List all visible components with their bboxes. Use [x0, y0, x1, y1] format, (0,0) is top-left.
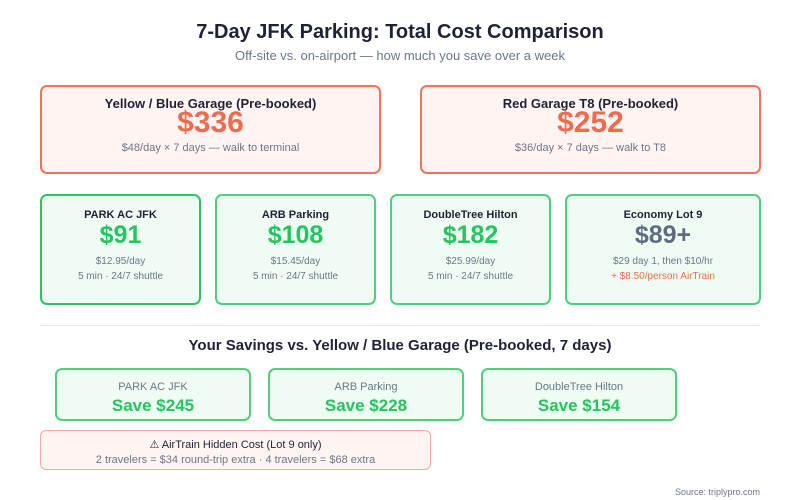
detail: $36/day × 7 days — walk to T8 [515, 142, 666, 154]
savings card: DoubleTree Hilton [481, 368, 677, 421]
panel: Economy Lot 9: $89+ [635, 221, 691, 249]
savings card: ARB Parking [268, 368, 464, 421]
panel: PARK AC JFK [40, 194, 201, 305]
price: $252 [557, 106, 624, 139]
panel: DoubleTree Hilton [390, 194, 551, 305]
callout: AirTrain hidden cost: ⚠ AirTrain Hidden Cost (Lot 9 only) [149, 439, 322, 451]
savings card: PARK AC JFK: PARK AC JFK [118, 381, 188, 393]
panel: Economy Lot 9: $29 day 1, then $10/hr [613, 256, 713, 267]
panel: Economy Lot 9: + $8.50/person AirTrain [611, 271, 715, 282]
savings heading: Your Savings vs. Yellow / Blue Garage (Pre-booked, 7 days) [189, 337, 611, 354]
savings card: DoubleTree Hilton: Save $154 [538, 396, 620, 415]
savings card: PARK AC JFK [55, 368, 251, 421]
panel: ARB Parking: ARB Parking [262, 209, 329, 221]
title: 7-Day JFK Parking: Total Cost Comparison [196, 21, 604, 43]
detail: $48/day × 7 days — walk to terminal [122, 142, 299, 154]
panel: Economy Lot 9: Economy Lot 9 [624, 209, 702, 221]
panel: ARB Parking: 5 min · 24/7 shuttle [253, 271, 338, 282]
panel: PARK AC JFK: 5 min · 24/7 shuttle [78, 271, 163, 282]
panel: Red Garage T8 [420, 85, 761, 174]
panel: DoubleTree Hilton: 5 min · 24/7 shuttle [428, 271, 513, 282]
panel: PARK AC JFK: $12.95/day [96, 256, 145, 267]
savings card: DoubleTree Hilton: DoubleTree Hilton [535, 381, 623, 393]
panel: PARK AC JFK: PARK AC JFK [84, 209, 157, 221]
price: $336 [177, 106, 244, 139]
heading: Red Garage T8 (Pre-booked) [503, 96, 678, 111]
savings card: PARK AC JFK: Save $245 [112, 396, 194, 415]
panel: Economy Lot 9 [565, 194, 761, 305]
heading: Yellow / Blue Garage (Pre-booked) [105, 96, 316, 111]
panel: ARB Parking: $108 [268, 221, 323, 249]
callout: AirTrain hidden cost [40, 430, 431, 470]
panel: ARB Parking: $15.45/day [271, 256, 320, 267]
panel: DoubleTree Hilton: $182 [443, 221, 498, 249]
panel: ARB Parking [215, 194, 376, 305]
source: Source: triplypro.com [675, 487, 760, 497]
savings card: ARB Parking: ARB Parking [334, 381, 397, 393]
subtitle: Off-site vs. on-airport — how much you save over a week [235, 48, 565, 63]
callout: AirTrain hidden cost: 2 travelers = $34 round-trip extra · 4 travelers = $68 extra [96, 454, 375, 466]
panel: Yellow / Blue Garage [40, 85, 381, 174]
panel: PARK AC JFK: $91 [100, 221, 141, 249]
panel: DoubleTree Hilton: $25.99/day [446, 256, 495, 267]
savings card: ARB Parking: Save $228 [325, 396, 407, 415]
panel: DoubleTree Hilton: DoubleTree Hilton [423, 209, 518, 221]
